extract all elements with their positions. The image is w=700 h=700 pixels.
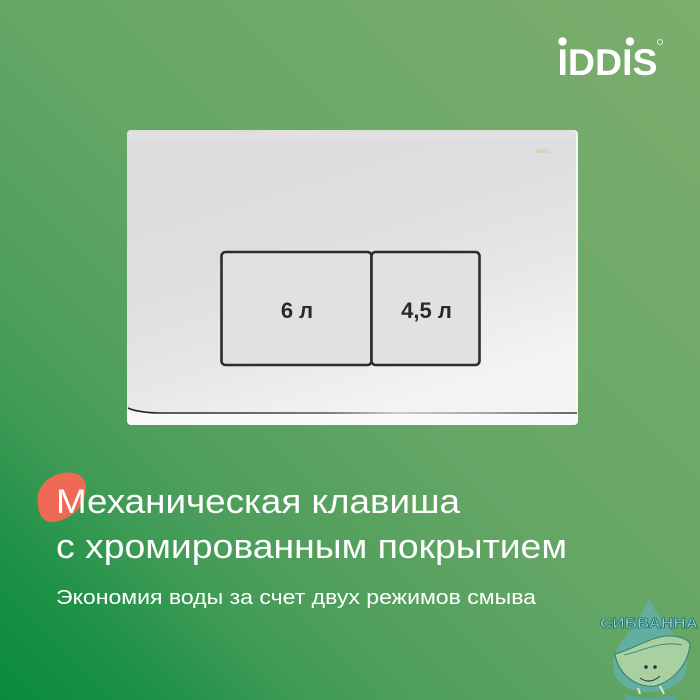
watermark: Sibvanna [600, 598, 698, 700]
heading line 1: Механическая клавиша [56, 483, 460, 521]
brand mark on plate: iddis [536, 148, 550, 155]
product: chrome flush plate [127, 130, 578, 425]
accent blob [38, 472, 86, 522]
right flush button [372, 252, 480, 365]
heading line 2: с хромированным покрытием [56, 528, 567, 566]
heading and subheading text [56, 483, 567, 609]
watermark: Sibvanna: СИБВАННА [600, 615, 698, 632]
left flush button: 6 л [281, 298, 313, 323]
left flush button [222, 252, 372, 365]
plate body [127, 130, 578, 425]
right flush button: 4,5 л [401, 298, 452, 323]
subheading: Экономия воды за счет двух режимов смыва [56, 587, 537, 609]
